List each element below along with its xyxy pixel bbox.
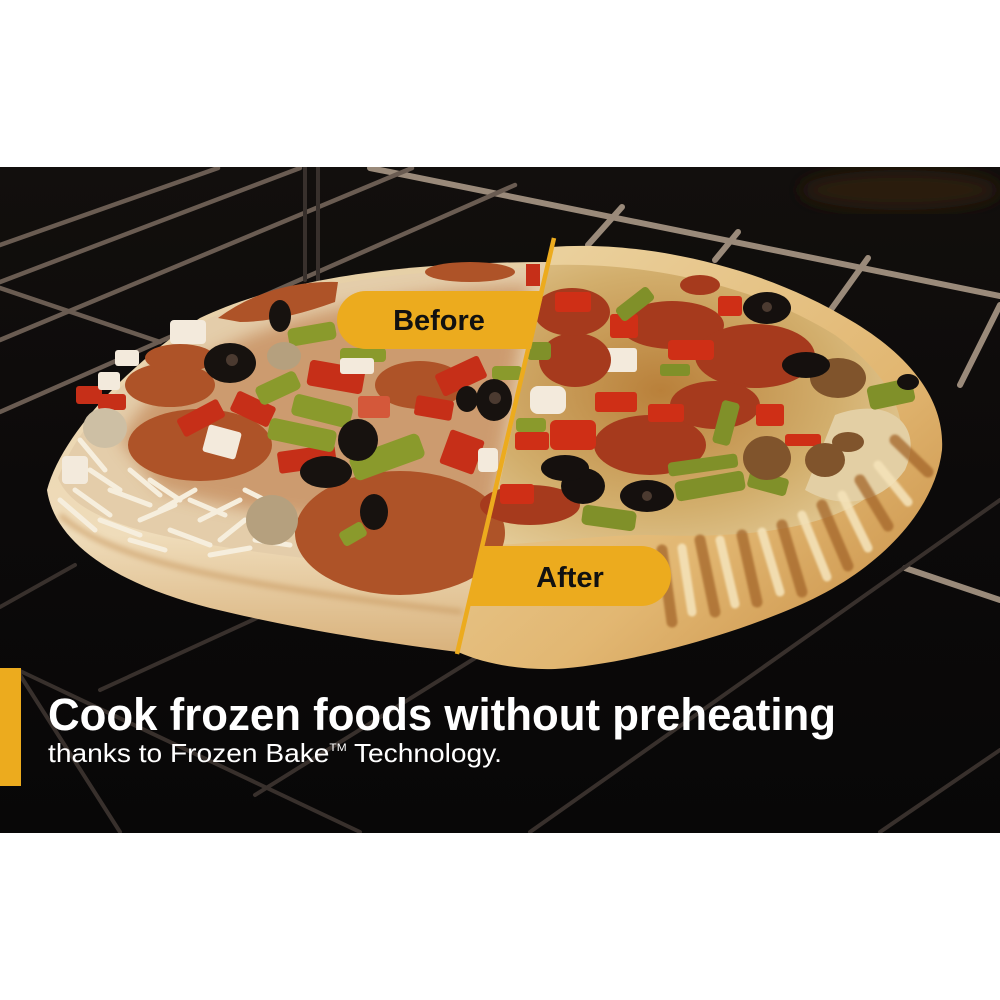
- caption headline: Cook frozen foods without preheating: [48, 689, 836, 740]
- frozen half: shredded mozzarella: [60, 440, 290, 555]
- before/after divider line: [457, 238, 554, 654]
- baked half: crust: [458, 246, 942, 669]
- caption subline: Technology.: [347, 738, 502, 768]
- baked half: pepperoni: [480, 275, 815, 525]
- frozen half: crust edge shading: [60, 515, 462, 612]
- oven racks: [0, 168, 1000, 832]
- baked half: cheese: [486, 265, 902, 545]
- baked crust ridges: [662, 440, 928, 622]
- badge: Before: [337, 291, 544, 349]
- baked half: olives: [541, 292, 919, 512]
- frozen half: pepperoni: [125, 262, 515, 595]
- frozen half: onion and cheese bits: [62, 320, 637, 484]
- pizza: [47, 246, 942, 669]
- caption subline: TM: [329, 742, 347, 754]
- frozen half: sausage: [83, 342, 301, 545]
- caption: [48, 697, 834, 768]
- frozen half: red peppers: [76, 264, 540, 475]
- baked half: sausage: [743, 358, 866, 480]
- baked half: red peppers: [500, 292, 821, 504]
- badge: Before: Before: [393, 305, 485, 337]
- caption accent bar: [0, 668, 21, 786]
- frozen half: crust: [47, 262, 548, 652]
- frozen half: cheese: [58, 389, 505, 554]
- baked half: green peppers: [527, 285, 916, 532]
- caption subline: thanks to Frozen Bake: [48, 738, 308, 768]
- badge: After: [470, 546, 671, 606]
- frozen half: olives: [204, 300, 512, 530]
- badge: After: After: [536, 562, 604, 594]
- frozen half: green peppers: [254, 321, 546, 547]
- photo panel: oven interior: [0, 167, 1000, 833]
